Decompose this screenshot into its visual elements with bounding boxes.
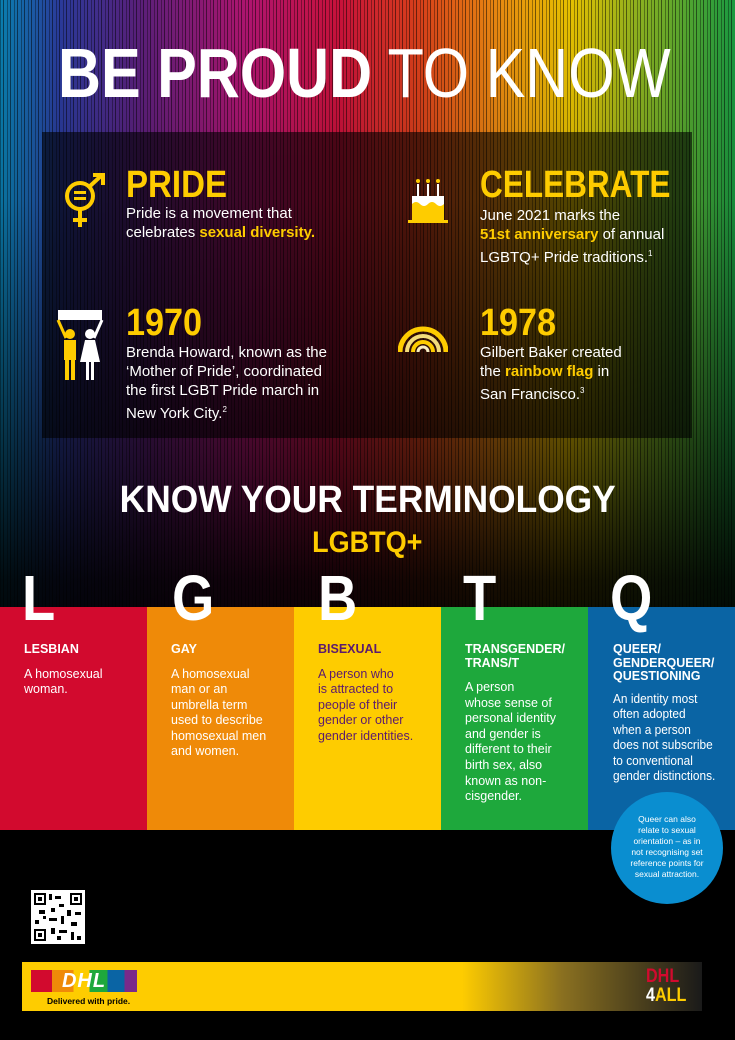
text: 1970: the first LGBT Pride march in: [126, 382, 319, 399]
big letters: L: [22, 562, 55, 634]
title: BE PROUD TO KNOW: [58, 34, 671, 112]
column: bisexual: people of their: [318, 698, 397, 712]
column: transgender: [441, 607, 588, 830]
column: bisexual: gender identities.: [318, 729, 413, 743]
callout: queer bubble: orientation – as in: [633, 836, 701, 846]
text: 1978: San Francisco.3: [480, 386, 584, 403]
column: bisexual: A person who: [318, 666, 394, 680]
text: celebrate: CELEBRATE: [480, 164, 670, 206]
column: gay: and women.: [171, 744, 239, 758]
icon: gender symbol: [65, 173, 105, 227]
text: pride: [126, 164, 315, 241]
column: transgender: and gender is: [465, 727, 541, 741]
column: queer: QUEER/: [613, 642, 661, 656]
callout: queer bubble: Queer can also: [638, 814, 696, 824]
text: celebrate: 51st anniversary of annual: [480, 226, 664, 243]
column: queer: [588, 607, 735, 830]
column: gay: [147, 607, 294, 830]
footer bar: [22, 962, 702, 1011]
text: 1978: [480, 302, 622, 403]
column: transgender: whose sense of: [465, 696, 552, 710]
column: transgender: personal identity: [465, 711, 556, 725]
text: 1970: [126, 302, 327, 422]
icon: rainbow: [398, 326, 448, 352]
column: bisexual: [294, 607, 441, 830]
column: queer: when a person: [613, 723, 691, 737]
column: gay: used to describe: [171, 713, 263, 727]
column: transgender: TRANS/T: [465, 656, 519, 670]
callout: queer bubble: reference points for: [630, 858, 704, 868]
text: 1970: Brenda Howard, known as the: [126, 344, 327, 361]
subheading: LGBTQ+: LGBTQ+: [312, 526, 423, 559]
logo: DHL 4ALL: [646, 966, 686, 1006]
big letters: Q: [610, 562, 652, 634]
column: queer: to conventional: [613, 754, 693, 768]
column: bisexual: gender or other: [318, 713, 403, 727]
column: queer: does not subscribe: [613, 738, 713, 752]
text: 1978: the rainbow flag in: [480, 363, 609, 380]
big letters: [22, 562, 652, 634]
column: transgender: cisgender.: [465, 789, 522, 803]
tagline: Delivered with pride.: [47, 996, 130, 1006]
text: celebrate: LGBTQ+ Pride traditions.1: [480, 249, 652, 266]
icon: cake: [408, 179, 448, 223]
callout: queer bubble: [611, 792, 723, 904]
callout: queer bubble: not recognising set: [631, 847, 703, 857]
text: celebrate: [480, 164, 670, 266]
logo: DHL rainbow: [31, 970, 137, 992]
column: queer: QUESTIONING: [613, 669, 701, 683]
column: gay: umbrella term: [171, 698, 247, 712]
text: pride: celebrates sexual diversity.: [126, 224, 315, 241]
column: gay: man or an: [171, 682, 227, 696]
logo: DHL 4ALL: 4ALL: [646, 985, 686, 1006]
text: 1970: ‘Mother of Pride’, coordinated: [126, 363, 322, 380]
logo: DHL rainbow: DHL: [62, 970, 106, 992]
column: bisexual: is attracted to: [318, 682, 393, 696]
column: lesbian: LESBIAN: [24, 642, 79, 656]
text: 1970: New York City.2: [126, 405, 227, 422]
panel: facts: [42, 132, 692, 438]
big letters: B: [318, 562, 357, 634]
column: gay: A homosexual: [171, 666, 250, 680]
column: queer: gender distinctions.: [613, 769, 715, 783]
big letters: T: [463, 562, 496, 634]
text: 1978: Gilbert Baker created: [480, 344, 622, 361]
column: gay: GAY: [171, 642, 197, 656]
column: transgender: birth sex, also: [465, 758, 542, 772]
logo: DHL 4ALL: DHL: [646, 966, 679, 987]
column: transgender: TRANSGENDER/: [465, 642, 565, 656]
big letters: G: [172, 562, 214, 634]
column: lesbian: [0, 607, 147, 830]
column: queer: GENDERQUEER/: [613, 656, 714, 670]
column: queer: often adopted: [613, 707, 686, 721]
column: gay: homosexual men: [171, 729, 266, 743]
column: transgender: known as non-: [465, 774, 546, 788]
text: pride: PRIDE: [126, 164, 227, 206]
column: lesbian: A homosexual: [24, 666, 103, 680]
column: lesbian: woman.: [24, 682, 68, 696]
text: 1978: 1978: [480, 302, 556, 344]
column: bisexual: BISEXUAL: [318, 642, 381, 656]
text: celebrate: June 2021 marks the: [480, 207, 620, 224]
column: transgender: different to their: [465, 742, 552, 756]
text: pride: Pride is a movement that: [126, 205, 292, 222]
text: 1970: 1970: [126, 302, 202, 344]
column: transgender: A person: [465, 680, 514, 694]
callout: queer bubble: sexual attraction.: [635, 869, 699, 879]
QR code: [31, 890, 85, 944]
icon: protesters: [56, 310, 104, 380]
heading: terminology: KNOW YOUR TERMINOLOGY: [119, 479, 616, 521]
callout: queer bubble: relate to sexual: [638, 825, 696, 835]
column: queer: An identity most: [613, 692, 697, 706]
